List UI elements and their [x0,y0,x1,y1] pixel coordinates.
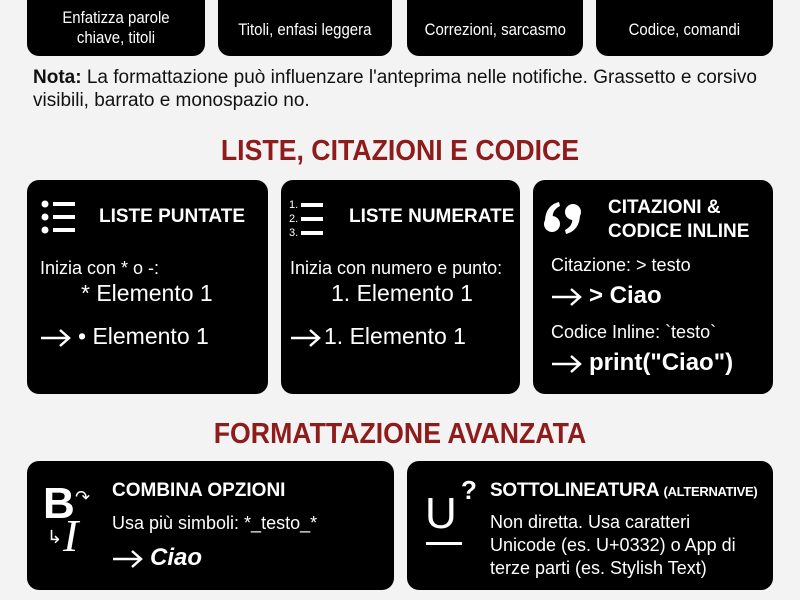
top card: strikethrough [407,0,583,56]
icon: underline question [425,475,477,545]
panel: citazioni e codice inline [533,180,773,394]
panel: combina opzioni: Usa più simboli: *_testo_* [112,513,317,533]
top card: monospace: Codice, comandi [629,20,740,39]
panel: liste puntate: Inizia con * o -: [40,258,159,278]
panel: citazioni e codice inline: print("Ciao") [589,349,733,376]
icon: B I combine [43,479,90,561]
note text: Nota: La formattazione può influenzare l'anteprima nelle notifiche. Grassetto e corsivo visibili, barrato e monospazio no. [33,67,757,111]
panel: sottolineatura: terze parti (es. Stylish Text) [490,558,707,578]
icon: numbered list: 1. [289,199,298,211]
panel: liste numerate: Inizia con numero e punto: [290,258,502,278]
top card: italic: Titoli, enfasi leggera [238,20,372,39]
top card: bold [27,0,205,56]
top card: bold: Enfatizza parole [62,8,170,27]
icon: B I combine: ↷ [75,487,90,507]
icon: numbered list [289,199,323,239]
top card: italic [218,0,392,56]
panel: liste puntate: * Elemento 1 [81,280,213,306]
top card: bold: chiave, titoli [77,28,155,47]
panel: liste puntate: • Elemento 1 [78,323,209,349]
panel: liste numerate: 1. Elemento 1 [324,323,466,349]
panel: sottolineatura: Unicode (es. U+0332) o App di [490,535,736,555]
panel: combina opzioni: Ciao [150,544,202,571]
panel: citazioni e codice inline: CITAZIONI & [608,197,721,218]
icon: numbered list: 2. [289,213,298,225]
icon: B I combine: I [63,510,78,561]
panel: citazioni e codice inline: Citazione: > testo [551,255,691,275]
icon: numbered list: 3. [289,227,298,239]
panel: sottolineatura [407,461,773,590]
panel: combina opzioni [27,461,394,590]
panel: liste numerate: 1. Elemento 1 [331,280,473,306]
panel: sottolineatura: Non diretta. Usa caratteri [490,512,690,532]
panel: liste numerate: LISTE NUMERATE [349,206,514,227]
icon: B I combine: ↳ [47,527,62,547]
panel: liste numerate [281,180,520,394]
panel: citazioni e codice inline: > Ciao [589,282,662,309]
heading: formattazione avanzata: FORMATTAZIONE AVANZATA [214,418,586,450]
heading: liste citazioni codice: LISTE, CITAZIONI E CODICE [221,135,579,167]
panel: citazioni e codice inline: CODICE INLINE [608,221,749,242]
icon: underline question: ? [461,475,477,505]
panel: sottolineatura: SOTTOLINEATURA (ALTERNATIVE) [490,480,757,501]
panel: citazioni e codice inline: Codice Inline: `testo` [551,322,716,342]
icon: B I combine: B [43,479,75,528]
top card: monospace [596,0,773,56]
icon: bullet list [42,200,75,234]
icon: quote [544,202,581,234]
panel: liste puntate [27,180,268,394]
icon: underline question: U [425,489,457,538]
top card: strikethrough: Correzioni, sarcasmo [424,20,566,39]
panel: liste puntate: LISTE PUNTATE [99,206,245,227]
panel: combina opzioni: COMBINA OPZIONI [112,480,285,501]
